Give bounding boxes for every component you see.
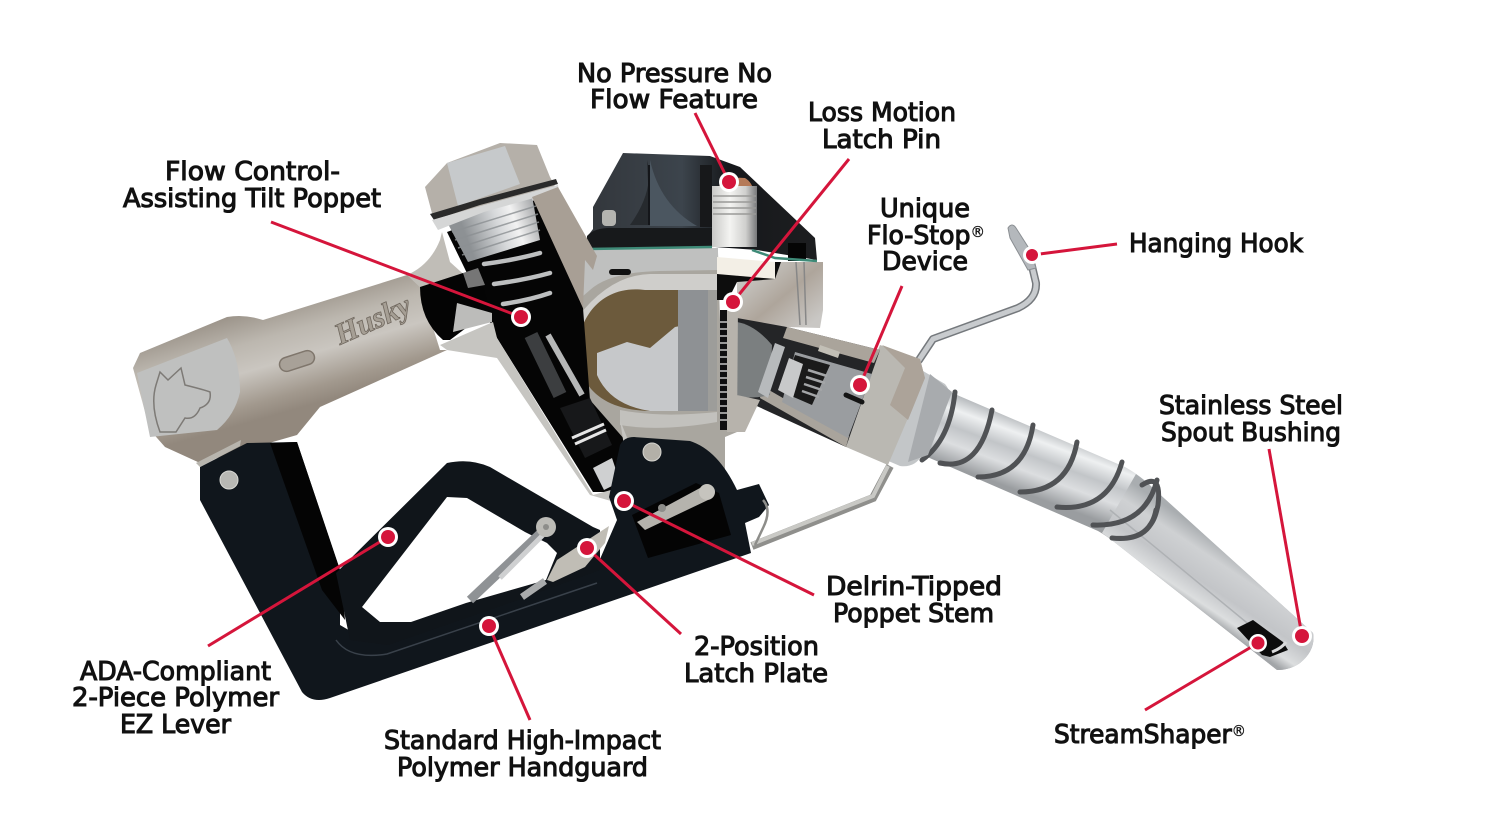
- spout collar: [843, 345, 952, 466]
- wolf head engraving: [154, 368, 210, 432]
- callout: Unique Flo-Stop Device: [850, 194, 985, 395]
- label text: 2-Piece Polymer: [72, 683, 279, 713]
- callout: ADA-Compliant 2-Piece Polymer EZ Lever: [72, 527, 398, 740]
- leader and dot: [479, 616, 530, 720]
- label text: Latch Plate: [684, 659, 828, 689]
- handle casting neck and window: [407, 232, 640, 505]
- label text: [1159, 391, 1343, 448]
- callout: StreamShaper: [1054, 634, 1267, 750]
- guard screw left: [220, 471, 238, 489]
- hand guard cast plate: [196, 440, 241, 467]
- callout: Standard High-Impact Polymer Handguard: [384, 616, 661, 783]
- label text: Unique: [880, 194, 970, 224]
- leader and dot: [208, 527, 398, 646]
- poppet spring coils: [484, 253, 550, 304]
- label text: Assisting Tilt Poppet: [123, 184, 381, 214]
- callout: Hanging Hook: [1023, 229, 1303, 264]
- label text: Stainless Steel: [1159, 391, 1343, 421]
- callout: 2-Position Latch Plate: [577, 538, 828, 689]
- foam filter: [593, 458, 620, 490]
- leader and dot: [271, 222, 531, 327]
- label text: Polymer Handguard: [397, 753, 648, 783]
- leader and dot: [695, 113, 739, 192]
- label text: [826, 572, 1002, 629]
- label text: StreamShaper: [1054, 720, 1240, 750]
- StreamShaper slot: [1237, 620, 1288, 657]
- label text: [384, 726, 661, 783]
- leader and dot: [723, 159, 849, 312]
- flow chamber: [575, 274, 720, 428]
- slotted metering strip: [720, 304, 760, 432]
- No Pressure No Flow cylinder: [712, 178, 757, 247]
- lower support strap: [752, 466, 890, 546]
- handguard: [200, 437, 769, 700]
- handle tube: [133, 275, 447, 463]
- wolf logo facet: [137, 338, 240, 437]
- latch pin: [699, 484, 715, 500]
- leader and dot: [1023, 244, 1117, 264]
- label text: EZ Lever: [120, 710, 231, 740]
- latch plate: [547, 526, 609, 582]
- latch link in window: [637, 488, 708, 530]
- label text: Latch Pin: [822, 125, 941, 155]
- black plate shadow: [717, 262, 781, 300]
- valve body casting: [560, 248, 737, 497]
- leader and dot: [1269, 449, 1312, 646]
- spout: [922, 389, 1313, 670]
- brand mark: Husky: [329, 288, 417, 352]
- leader and dot: [850, 286, 902, 395]
- Flo-Stop cutaway tube: [737, 318, 880, 447]
- label text: Poppet Stem: [833, 599, 994, 629]
- delrin spring block: [560, 398, 612, 458]
- label text: [684, 632, 828, 689]
- nozzle illustration: [133, 143, 1313, 700]
- poppet black column: [447, 196, 625, 492]
- bonnet cap: [425, 143, 597, 308]
- label text: [123, 157, 381, 214]
- leader and dot: [614, 491, 814, 595]
- handguard window: [632, 483, 731, 558]
- EZ lever: [336, 461, 600, 645]
- label text: 2-Position: [694, 632, 819, 662]
- label text: No Pressure No: [577, 59, 772, 89]
- leader and dot: [1145, 634, 1267, 710]
- callout: No Pressure No Flow Feature: [577, 59, 772, 192]
- label text: Flo-Stop: [867, 221, 974, 251]
- grip slot: [278, 349, 316, 373]
- hanging hook wire: [919, 225, 1036, 360]
- leader and dot: [577, 538, 681, 634]
- label text: [867, 194, 985, 277]
- label text: Loss Motion: [808, 98, 956, 128]
- label text: Spout Bushing: [1161, 418, 1341, 448]
- lever link: [470, 517, 556, 600]
- label text: [577, 59, 772, 115]
- threaded bonnet: [447, 196, 540, 262]
- label text: [808, 98, 956, 155]
- guard screw right: [643, 443, 661, 461]
- label text: Flow Feature: [590, 85, 758, 115]
- label text: Standard High-Impact: [384, 726, 661, 756]
- callout: Loss Motion Latch Pin: [723, 98, 956, 312]
- callout: Delrin-Tipped Poppet Stem: [614, 491, 1002, 629]
- lever lower link: [522, 581, 545, 597]
- poppet stem rod: [548, 335, 582, 395]
- rear spring clip: [755, 500, 768, 545]
- label text: ADA-Compliant: [80, 657, 271, 687]
- label text: Device: [882, 247, 968, 277]
- label text: ®: [970, 223, 985, 241]
- callout: Stainless Steel Spout Bushing: [1159, 391, 1343, 646]
- callout: Flow Control-Assisting Tilt Poppet: [123, 157, 531, 327]
- label text: Delrin-Tipped: [826, 572, 1002, 602]
- label text: [72, 657, 279, 740]
- black valve cap: [587, 153, 817, 261]
- body casting right: [737, 262, 823, 328]
- label text: Flow Control-: [165, 157, 340, 187]
- label text: Hanging Hook: [1129, 229, 1303, 259]
- white plate: [717, 257, 775, 279]
- spout coil spring: [922, 392, 1159, 538]
- label text: ®: [1232, 722, 1246, 740]
